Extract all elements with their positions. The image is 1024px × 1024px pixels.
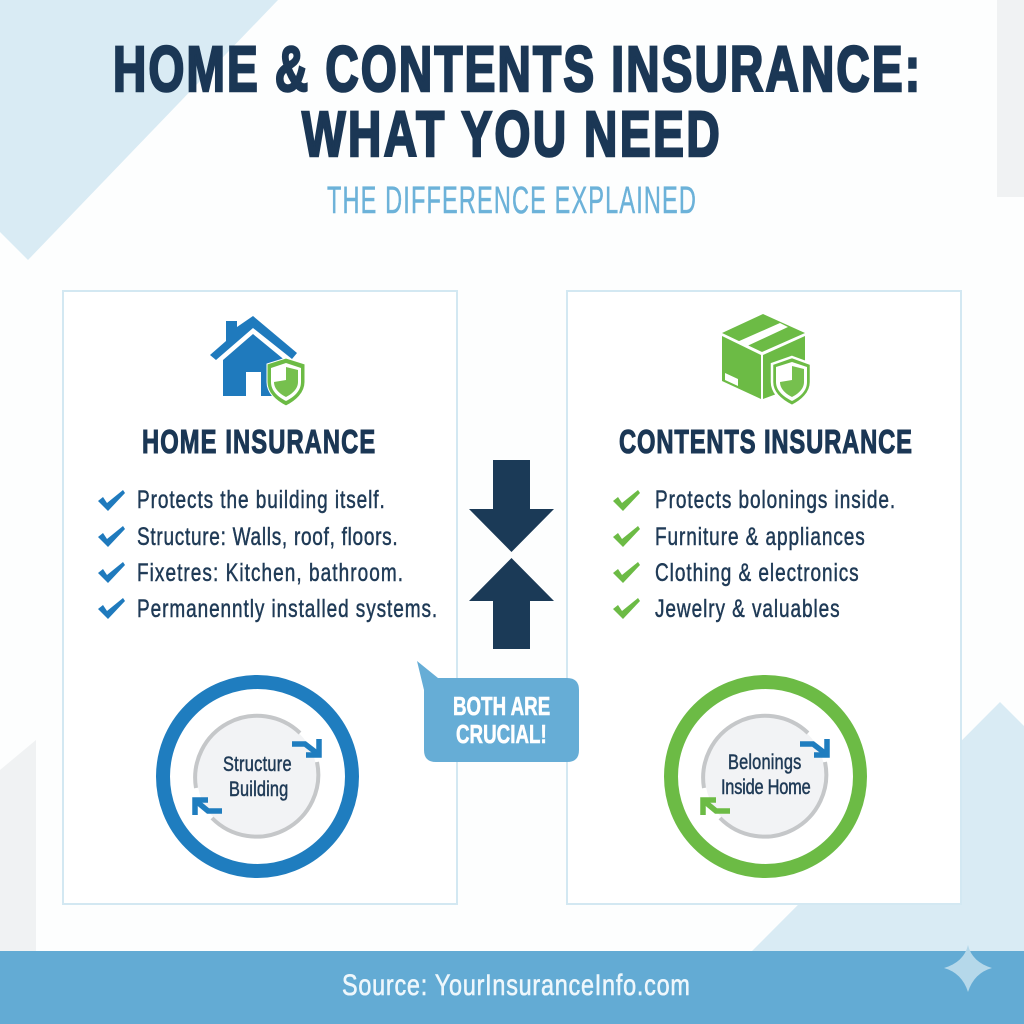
list: contents coverage: [613, 485, 895, 623]
source text: Source: YourInsuranceInfo.com: [342, 968, 690, 1002]
list: contents coverage: Clothing & electronics: [655, 558, 859, 587]
title: [113, 34, 920, 170]
footer band: [0, 951, 1024, 1024]
icon: sparkle: [944, 945, 992, 992]
icon: house with shield: [210, 316, 305, 406]
list: contents coverage: Jewelry & valuables: [655, 594, 840, 623]
list: home coverage: Structure: Walls, roof, floors.: [137, 522, 398, 551]
diagram: belongings inside home circle: Inside Home: [721, 775, 811, 798]
panel: contents insurance: [567, 291, 961, 904]
list: home coverage: Protects the building itself.: [137, 485, 385, 514]
list: home coverage: [98, 485, 437, 623]
diagram: belongings inside home circle: [671, 682, 860, 871]
diagram: structure building circle: Structure: [223, 752, 292, 775]
diagram: structure building circle: [163, 682, 352, 871]
list: home coverage: Permanenntly installed systems.: [137, 594, 437, 623]
arrow: pointing up: [469, 558, 554, 649]
diagram: structure building circle: Building: [229, 777, 288, 800]
list: home coverage: Fixetres: Kitchen, bathroom.: [137, 558, 403, 587]
diagram: belongings inside home circle: Belonings: [728, 750, 801, 773]
subtitle: THE DIFFERENCE EXPLAINED: [327, 178, 696, 221]
arrow: pointing down: [469, 460, 554, 552]
title: HOME & CONTENTS INSURANCE:: [113, 34, 920, 105]
callout: both are crucial: BOTH ARE: [453, 691, 550, 721]
list: contents coverage: Furniture & appliances: [655, 522, 865, 551]
title: WHAT YOU NEED: [302, 99, 720, 170]
icon: box with shield: [722, 314, 811, 406]
callout: both are crucial: [417, 661, 579, 762]
heading: home insurance: HOME INSURANCE: [142, 424, 375, 461]
callout: both are crucial: CRUCIAL!: [456, 719, 547, 749]
list: contents coverage: Protects bolonings inside.: [655, 485, 895, 514]
panel: home insurance: [63, 291, 457, 904]
heading: contents insurance: CONTENTS INSURANCE: [619, 424, 912, 461]
